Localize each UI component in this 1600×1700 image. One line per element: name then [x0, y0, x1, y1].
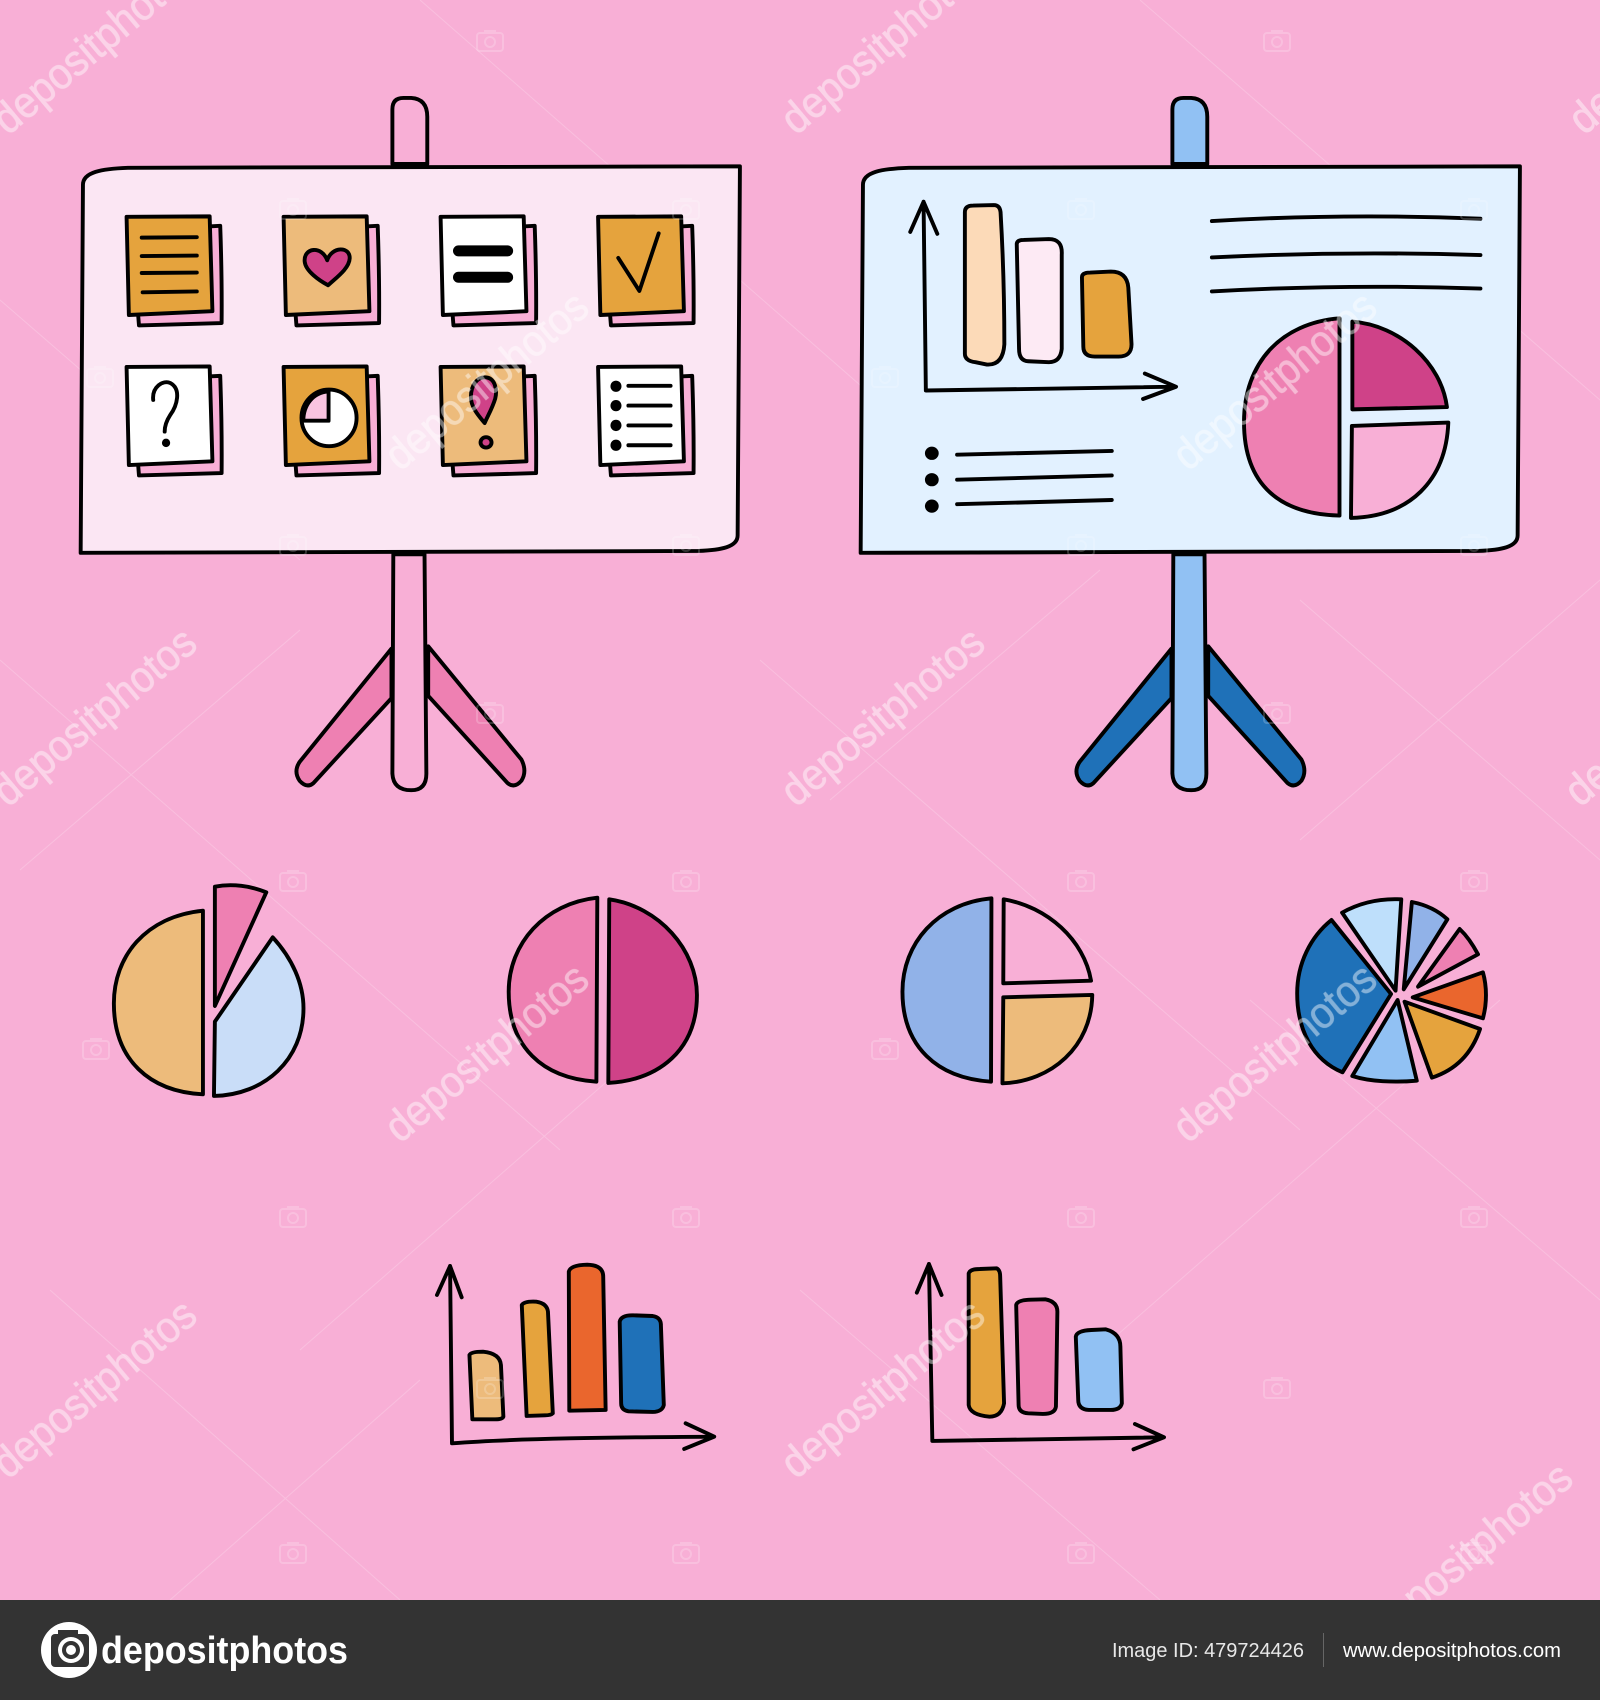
bar chart [965, 205, 1132, 365]
image id: Image ID: 479724426 [1112, 1640, 1304, 1662]
text lines, top right [1212, 216, 1480, 291]
repeated diagonal watermark text: depositphotos [1359, 1452, 1582, 1651]
pie chart: seven slices [1297, 899, 1486, 1082]
note: bullet list [598, 366, 694, 475]
note: pie chart [284, 366, 379, 475]
repeated diagonal watermark text: depositphotos [771, 1289, 994, 1488]
pie chart: two halves [509, 898, 697, 1083]
note: question mark [127, 366, 222, 475]
easel legs, pink [296, 646, 524, 785]
note: check mark [598, 216, 694, 325]
bullet list [925, 447, 1112, 513]
board surface [861, 166, 1520, 553]
bar chart: four rising bars [437, 1265, 714, 1449]
repeated diagonal watermark text: depositphotos [1163, 281, 1386, 480]
axes with arrows [910, 202, 1176, 399]
website url: www.depositphotos.com [1342, 1640, 1561, 1662]
repeated diagonal watermark text: depositphotos [1163, 953, 1386, 1152]
pie chart: exploded three slices [114, 885, 303, 1096]
note: exclamation mark [441, 366, 536, 475]
note: heart [284, 216, 379, 325]
panel: blue presentation board with charts [861, 98, 1520, 790]
easel post, light blue [1172, 98, 1207, 790]
easel post, pink [392, 98, 427, 790]
repeated diagonal watermark text: depositphotos [375, 281, 598, 480]
repeated diagonal watermark text: depositphotos [771, 617, 994, 816]
easel legs, blue [1076, 646, 1304, 785]
board surface [81, 166, 740, 553]
pie chart [1244, 318, 1448, 518]
panel: pink presentation board with sticky notes [81, 98, 740, 790]
bar chart: three falling bars [917, 1264, 1164, 1449]
pie chart: half and two quarters [902, 898, 1092, 1083]
repeated diagonal watermark text: depositphotos [375, 953, 598, 1152]
note: text lines [127, 216, 222, 325]
logo wordmark: depositphotos [101, 1630, 348, 1672]
icon: camera logo [41, 1622, 97, 1678]
watermark camera icons [83, 30, 1487, 1563]
footer band [0, 1600, 1600, 1700]
note: equals bars [441, 216, 536, 325]
